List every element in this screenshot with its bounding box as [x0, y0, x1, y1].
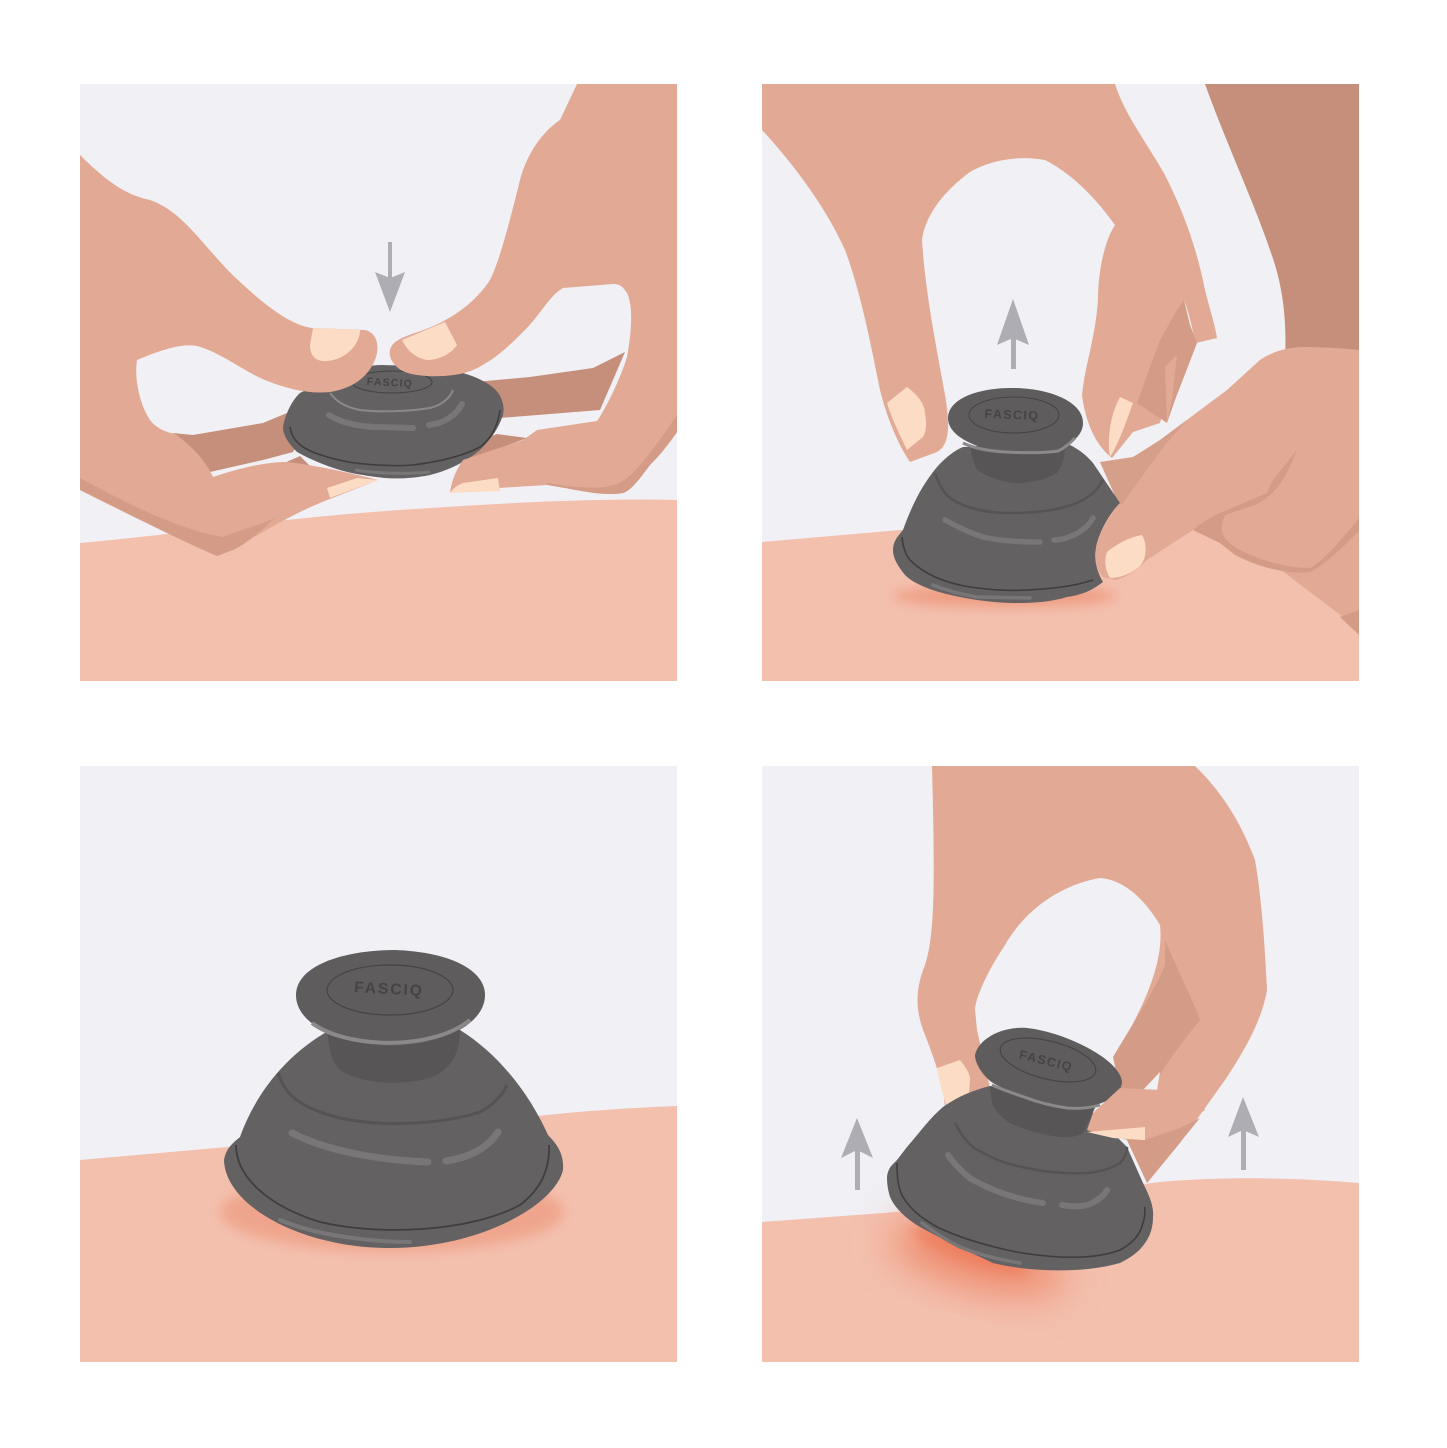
body skin	[762, 1178, 1359, 1362]
forearm in shadow	[1205, 84, 1359, 360]
hand	[918, 766, 1267, 1183]
thumb nail	[1105, 535, 1146, 578]
cup	[893, 388, 1120, 603]
redness glow under cup	[883, 1207, 1073, 1309]
cup logo	[1000, 1038, 1096, 1082]
cup pressed flat	[283, 365, 504, 478]
cup logo: FASCIQ	[354, 979, 424, 1000]
cup cap	[948, 388, 1083, 446]
cup logo: FASCIQ	[367, 376, 413, 390]
panel: step 3, cup resting on skin	[80, 766, 677, 1362]
panel: step 2, squeeze and place on skin	[762, 84, 1360, 681]
arrow down	[375, 242, 405, 312]
cup cap	[296, 950, 485, 1030]
thumb over cup	[1095, 503, 1121, 576]
body skin	[762, 505, 1359, 681]
cup	[224, 950, 563, 1248]
nail	[310, 328, 360, 361]
upper hand	[762, 84, 1217, 462]
body skin	[80, 500, 677, 681]
right hand	[390, 84, 677, 494]
body skin	[80, 1106, 677, 1362]
glow under cup	[893, 585, 1117, 607]
cup neck	[328, 1030, 460, 1083]
left hand	[80, 155, 378, 556]
cup logo: FASCIQ	[984, 407, 1040, 423]
infographic: four cupping steps	[80, 84, 1359, 1362]
cup logo: FASCIQ	[1018, 1048, 1074, 1074]
back fingers	[173, 352, 625, 472]
cup cap	[975, 1028, 1122, 1108]
glow under cup	[217, 1190, 567, 1256]
cup neck	[990, 1086, 1095, 1137]
cup	[887, 1028, 1153, 1270]
arrow up	[997, 299, 1029, 369]
cup logo	[969, 397, 1059, 433]
lower right hand	[1095, 347, 1360, 635]
arrow up right	[1228, 1097, 1259, 1170]
panel: step 1, press the cup flat	[80, 84, 677, 681]
cup neck	[971, 446, 1065, 483]
arrow up left	[841, 1118, 873, 1190]
gripping finger	[1087, 1088, 1205, 1140]
panel: step 4, lift the cup off	[762, 766, 1359, 1362]
cup logo	[352, 371, 432, 393]
cup logo	[327, 965, 453, 1015]
